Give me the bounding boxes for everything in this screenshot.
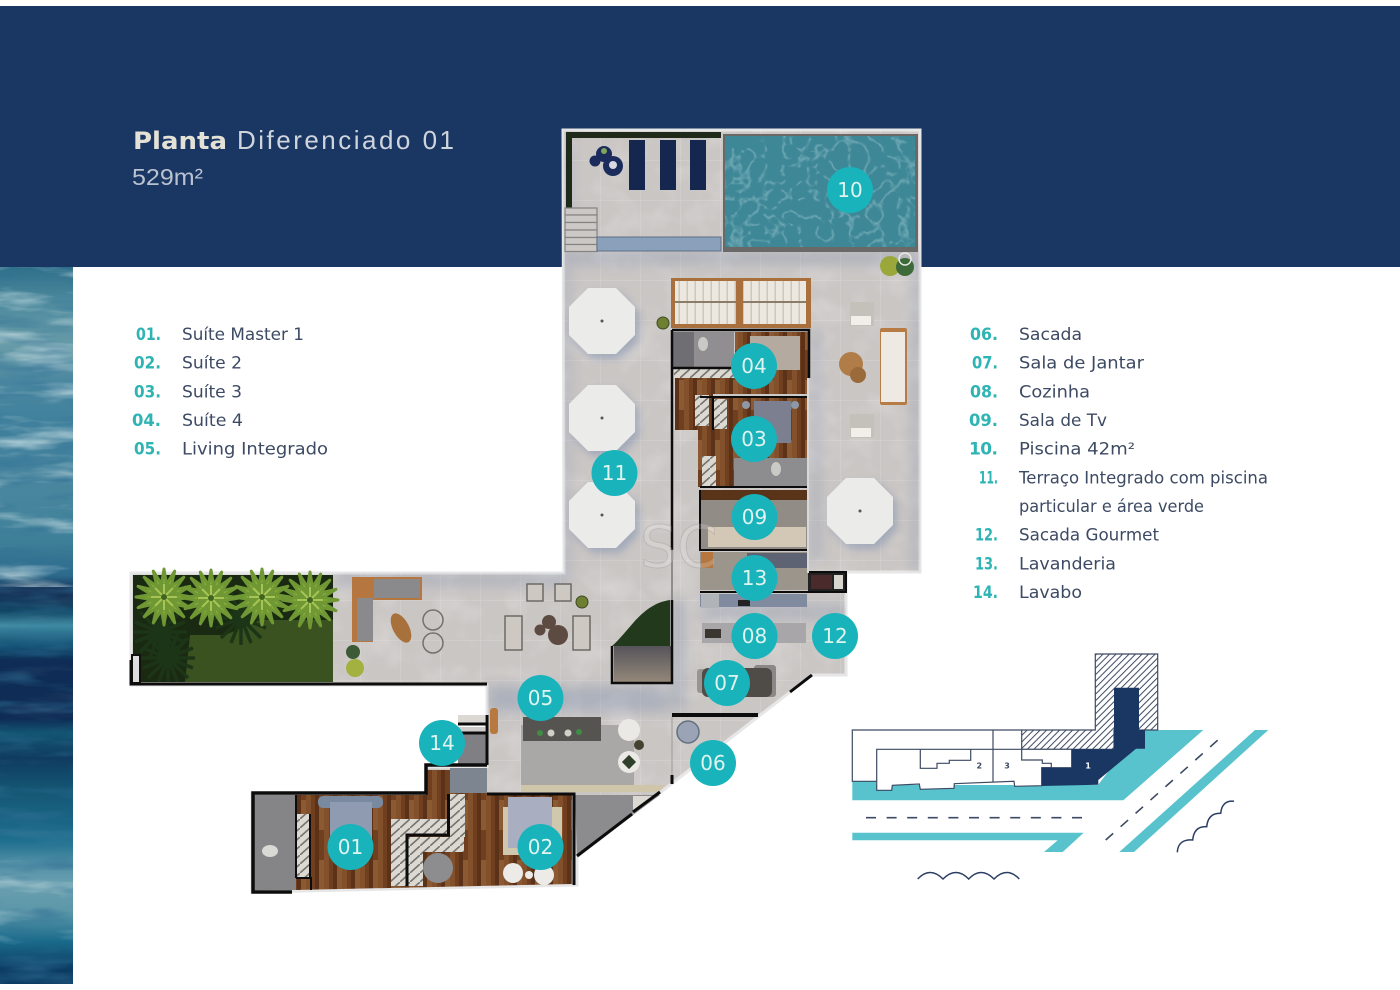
hall floor <box>450 768 487 793</box>
unit steps <box>920 749 1051 768</box>
cushions <box>537 729 582 736</box>
road centre dashes horizontal <box>866 817 1083 819</box>
marker 11: 11 <box>602 461 627 485</box>
suite 2 closet box <box>633 796 656 814</box>
watermark: SC <box>640 513 717 581</box>
marker 03 <box>731 416 777 462</box>
laundry <box>700 552 808 590</box>
road centre dashes diagonal <box>1106 739 1219 840</box>
legend item 05: Living Integrado <box>182 440 328 459</box>
garden ground <box>133 575 333 682</box>
suite 3 closets <box>695 395 727 486</box>
teal ground <box>852 730 1203 800</box>
hedge <box>566 132 721 208</box>
marker 08: 08 <box>742 624 767 648</box>
marker 10: 10 <box>837 178 863 202</box>
pergola <box>671 278 811 328</box>
garden <box>132 569 338 685</box>
living room <box>521 717 665 792</box>
hatched tower area <box>1022 654 1158 749</box>
marker 09: 09 <box>742 505 767 529</box>
master bed <box>318 796 383 852</box>
title: Diferenciado 01 <box>237 125 454 155</box>
suite 4 bed <box>750 336 800 370</box>
potted plant by pool <box>880 253 914 276</box>
dark palms <box>133 591 268 685</box>
legend item 03: Suíte 3 <box>182 382 242 401</box>
legend item 02 <box>134 354 242 374</box>
marker 05 <box>518 675 564 721</box>
suite 4 wood hall <box>675 378 808 430</box>
legend item 05: 05. <box>134 440 161 460</box>
legend item 11: particular e área verde <box>1019 497 1204 516</box>
side table <box>634 740 644 750</box>
legend item 13 <box>975 554 1116 574</box>
marker 09 <box>732 494 778 540</box>
wire chairs <box>423 610 443 653</box>
coffee table <box>386 610 416 646</box>
tv room floor <box>700 500 808 550</box>
tv sofa <box>708 527 806 547</box>
sofa <box>880 328 907 405</box>
round rug <box>423 853 453 883</box>
unit labels: 3 <box>1004 762 1010 770</box>
area subtitle: 529m² <box>132 164 203 190</box>
small plant <box>657 317 669 329</box>
toilet <box>262 845 278 857</box>
suite 3 toilet <box>771 462 781 476</box>
walls <box>131 330 846 892</box>
legend item 09: Sala de Tv <box>1019 411 1107 430</box>
legend item 08: 08. <box>970 382 998 402</box>
wave line right <box>1177 801 1234 852</box>
suite 2 bed <box>508 797 552 848</box>
building outline <box>852 730 1022 781</box>
suite 3 bath <box>734 458 808 487</box>
divider <box>992 749 994 782</box>
room number markers <box>328 167 873 870</box>
suite 2 bath <box>575 795 660 856</box>
legend item 08: Cozinha <box>1019 382 1090 401</box>
bench <box>521 785 665 792</box>
marker 04 <box>731 343 777 389</box>
legend item 07: Sala de Jantar <box>1019 354 1144 373</box>
lawn <box>185 620 333 682</box>
building footprint <box>877 749 1072 790</box>
legend: rooms 06 to 14 <box>969 325 1268 603</box>
marker 12 <box>812 613 858 659</box>
suite 4 bedroom <box>735 332 808 394</box>
suite 2 chairs <box>503 863 554 885</box>
legend item 02: Suíte 2 <box>182 354 242 373</box>
highlighted unit <box>1042 688 1145 786</box>
sofa <box>523 717 601 741</box>
pool <box>723 134 918 252</box>
outdoor lounge <box>346 577 443 677</box>
dining table <box>697 665 776 697</box>
master closets <box>295 794 465 886</box>
header band <box>0 6 1400 267</box>
planter and pit <box>612 600 671 683</box>
legend item 10: 10. <box>969 440 998 460</box>
legend item 07 <box>972 354 1144 374</box>
suite 4 toilet <box>698 337 708 351</box>
teal sidewalk diagonal <box>1119 730 1268 852</box>
marker 13: 13 <box>742 566 767 590</box>
legend item 13: 13. <box>975 554 998 574</box>
unit labels: 1 <box>1085 762 1091 770</box>
marker 07 <box>704 660 750 706</box>
service box <box>808 572 845 592</box>
pouf 1 <box>618 719 640 741</box>
legend item 08 <box>970 382 1090 402</box>
side tables <box>590 146 623 176</box>
legend item 06: 06. <box>970 325 998 345</box>
armchair bottom <box>850 414 874 438</box>
legend item 12: Sacada Gourmet <box>1019 526 1160 545</box>
legend item 06 <box>970 325 1082 345</box>
legend item 11: Terraço Integrado com piscina <box>1018 468 1268 487</box>
legend item 09 <box>969 411 1107 431</box>
legend item 01: 01. <box>136 325 161 345</box>
shaft <box>132 655 140 683</box>
upper suites block <box>672 332 845 592</box>
tv room strip <box>700 490 808 500</box>
legend item 14: 14. <box>973 583 998 603</box>
location key plan <box>852 654 1268 879</box>
umbrellas <box>569 288 897 553</box>
legend item 02: 02. <box>134 354 161 374</box>
terrace lounge right <box>839 302 907 438</box>
title <box>133 125 454 155</box>
marker 07: 07 <box>714 671 740 695</box>
marker 14 <box>419 720 465 766</box>
marker 01: 01 <box>338 835 363 859</box>
legend item 04: Suíte 4 <box>182 411 243 430</box>
suite 4 bath <box>694 332 734 368</box>
legend item 10 <box>969 440 1135 460</box>
legend item 04: 04. <box>132 411 161 431</box>
suite 3 nightstands <box>742 401 799 409</box>
suite 2 rug <box>503 807 562 855</box>
pouf <box>839 352 866 383</box>
cushion <box>622 755 636 769</box>
kitchen <box>700 594 807 643</box>
outdoor dining <box>505 584 590 650</box>
legend item 14 <box>973 583 1082 603</box>
unit labels: 2 <box>977 762 982 770</box>
master bath <box>254 795 297 890</box>
legend item 01: Suíte Master 1 <box>182 325 304 344</box>
marker 08 <box>732 613 778 659</box>
legend item 03 <box>134 382 242 402</box>
marker 14: 14 <box>429 731 455 755</box>
legend item 06: Sacada <box>1019 325 1082 344</box>
balcony 06 chair <box>677 721 699 743</box>
armchair top <box>850 302 874 326</box>
bright palms <box>136 569 338 628</box>
umbrella shadows <box>573 293 897 553</box>
marker 03: 03 <box>741 427 767 451</box>
wood floor <box>296 770 572 890</box>
unit labels <box>977 762 1091 770</box>
suite 3 wood floor <box>698 396 808 487</box>
marker 05: 05 <box>528 686 553 710</box>
suite 4 shower <box>672 332 694 368</box>
legend item 01 <box>136 325 304 345</box>
legend item 07: 07. <box>972 354 998 374</box>
floor plan <box>131 130 921 895</box>
marker 02 <box>518 824 564 870</box>
marker 11 <box>592 450 638 496</box>
glass railing <box>597 237 721 251</box>
marker 04: 04 <box>741 354 767 378</box>
legend item 05 <box>134 440 328 460</box>
umbrella poles <box>600 320 862 516</box>
legend: rooms 01 to 05 <box>132 325 328 460</box>
suite 3 bed <box>754 401 791 443</box>
title: Planta <box>133 127 227 155</box>
rug <box>521 725 634 785</box>
console <box>490 708 498 734</box>
legend item 13: Lavanderia <box>1019 554 1116 573</box>
lavabo <box>458 715 486 765</box>
marker 13 <box>732 555 778 601</box>
teal sidewalk horizontal <box>852 833 1084 852</box>
legend item 11 <box>979 468 1268 516</box>
wave line bottom <box>918 872 1019 879</box>
legend item 09: 09. <box>969 411 998 431</box>
legend item 14: Lavabo <box>1019 583 1082 602</box>
legend item 03: 03. <box>134 382 161 402</box>
marker 12: 12 <box>822 624 848 648</box>
marker 06: 06 <box>700 751 726 775</box>
legend item 10: Piscina 42m² <box>1019 440 1135 459</box>
suite 4 closet <box>674 368 734 378</box>
marker 10 <box>827 167 873 213</box>
plan base floor <box>131 130 921 895</box>
lower suites <box>254 770 660 890</box>
umbrella tops <box>569 288 893 548</box>
legend item 04 <box>132 411 243 431</box>
stairs <box>565 208 597 252</box>
potted plants <box>346 645 364 677</box>
pouf 2 <box>618 751 640 773</box>
marker 01 <box>328 824 374 870</box>
marker 02: 02 <box>528 835 553 859</box>
marker 06 <box>690 740 736 786</box>
legend item 12: 12. <box>975 526 998 546</box>
l-shaped sofa <box>352 577 422 642</box>
legend item 11: 11. <box>979 468 998 488</box>
ocean photo strip <box>0 267 73 984</box>
sunbeds <box>629 140 706 190</box>
